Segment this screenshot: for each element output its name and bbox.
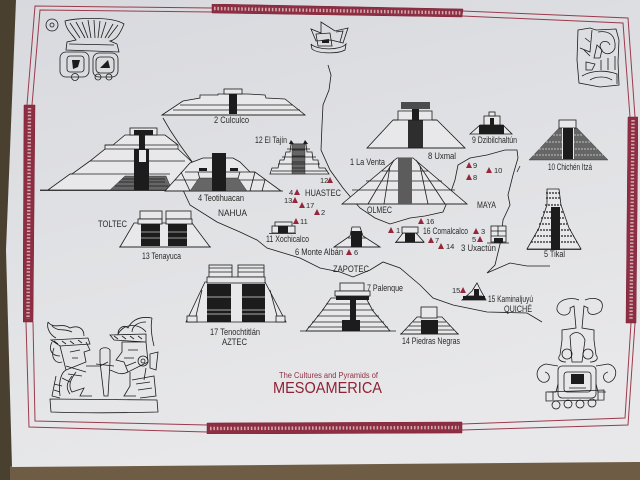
pyramid: Xochicalco bbox=[269, 222, 296, 234]
site markers: 5 bbox=[472, 235, 476, 244]
icon: seated figures bottom left bbox=[48, 317, 158, 413]
pyramid: Piedras Negras bbox=[400, 307, 459, 334]
site markers: 9 bbox=[473, 161, 477, 170]
pyramid: Palenque bbox=[300, 283, 396, 331]
site markers: 16 bbox=[426, 217, 434, 226]
title: MESOAMERICA: MESOAMERICA bbox=[273, 380, 383, 397]
label: NAHUA: NAHUA bbox=[218, 208, 247, 218]
label: 6 Monte Alban: 6 Monte Albán bbox=[295, 247, 343, 257]
label: 16 Comalcalco: 16 Comalcalco bbox=[423, 226, 468, 236]
pyramid: Dzibilchaltun bbox=[470, 112, 512, 134]
label: AZTEC: AZTEC bbox=[222, 337, 247, 347]
label: 14 Piedras Negras: 14 Piedras Negras bbox=[402, 336, 460, 346]
pyramid: large temple bbox=[40, 128, 195, 190]
site markers: 11 bbox=[300, 217, 308, 226]
pyramid: Tikal bbox=[527, 189, 581, 250]
site markers: 17 bbox=[306, 201, 314, 210]
pyramid: Kaminaljuyu bbox=[462, 283, 486, 300]
label: OLMEC: OLMEC bbox=[367, 205, 392, 215]
label: 10 Chichen Itza: 10 Chichén Itzá bbox=[548, 162, 592, 172]
site markers: 6 bbox=[354, 248, 358, 257]
site markers: 12 bbox=[320, 176, 328, 185]
site markers: 2 bbox=[321, 208, 325, 217]
label: ZAPOTEC: ZAPOTEC bbox=[333, 264, 369, 274]
site markers: 3 bbox=[481, 227, 485, 236]
icon: glyph top right bbox=[577, 28, 619, 87]
label: 12 El Tajin: 12 El Tajín bbox=[255, 135, 287, 145]
pyramid: El Tajin bbox=[270, 140, 329, 174]
icon: Zapotec urn bottom right bbox=[537, 298, 616, 409]
pyramid: Uxmal bbox=[367, 102, 465, 148]
icon: glyph top left bbox=[46, 18, 124, 80]
site markers: 7 bbox=[435, 236, 439, 245]
label: 1 La Venta: 1 La Venta bbox=[350, 157, 385, 167]
site markers bbox=[284, 161, 502, 295]
label: 7 Palenque: 7 Palenque bbox=[367, 283, 403, 293]
label: MAYA: MAYA bbox=[477, 200, 496, 210]
label: TOLTEC: TOLTEC bbox=[98, 219, 127, 229]
label: HUASTEC: HUASTEC bbox=[305, 188, 341, 198]
label: 3 Uxactun: 3 Uxactún bbox=[461, 243, 496, 253]
site markers: 10 bbox=[494, 166, 502, 175]
pyramid: Culculco bbox=[162, 89, 305, 115]
pyramid: Uxactun bbox=[487, 226, 509, 243]
site markers: 15 bbox=[452, 286, 460, 295]
label: QUICHE: QUICHÉ bbox=[504, 304, 532, 314]
title: The Cultures and Pyramids of: The Cultures and Pyramids of bbox=[279, 371, 379, 380]
site markers: 13 bbox=[284, 196, 292, 205]
pyramid: Tenayuca bbox=[119, 211, 211, 247]
site markers: 4 bbox=[289, 188, 293, 197]
pyramid: La Venta bbox=[342, 158, 467, 204]
site markers: 1 bbox=[396, 226, 400, 235]
label: 17 Tenochtitlan: 17 Tenochtitlán bbox=[210, 327, 260, 337]
label: 9 Dzibilchaltun: 9 Dzibilchaltún bbox=[472, 135, 517, 145]
site markers: 14 bbox=[446, 242, 454, 251]
label: 2 Culculco: 2 Culculco bbox=[214, 115, 249, 125]
pyramid: Chichen Itza bbox=[529, 120, 608, 160]
label: 15 Kaminaljuyu: 15 Kaminaljuyú bbox=[488, 294, 533, 304]
label: 4 Teotihuacan: 4 Teotihuacan bbox=[198, 193, 244, 203]
map outlines bbox=[163, 65, 550, 322]
label: 13 Tenayuca: 13 Tenayuca bbox=[142, 251, 181, 261]
pyramid: Tenochtitlan bbox=[186, 265, 286, 322]
pyramid: Comalcalco bbox=[395, 227, 424, 242]
site markers: 8 bbox=[473, 173, 477, 182]
label: 8 Uxmal: 8 Uxmal bbox=[428, 151, 456, 161]
pyramid: Teotihuacan bbox=[165, 153, 283, 191]
label: 5 Tikal: 5 Tikal bbox=[544, 249, 565, 259]
pyramid: Monte Alban bbox=[334, 227, 380, 247]
icon: glyph top centre bbox=[311, 22, 348, 53]
label: 11 Xochicalco: 11 Xochicalco bbox=[266, 234, 309, 244]
